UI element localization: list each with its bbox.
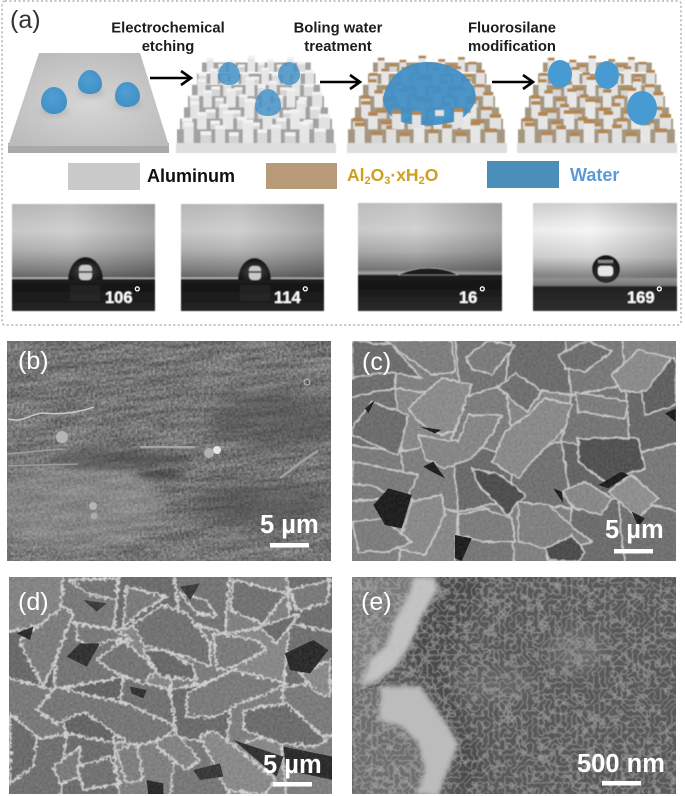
arrow: step 2 <box>320 75 360 89</box>
degree mark 169: ° <box>656 284 663 302</box>
label: (c): (c) <box>362 348 391 376</box>
arrow: step 1 <box>150 71 191 85</box>
legend: Al2O3·xH2O: 2 <box>419 175 425 187</box>
label: (a): (a) <box>10 6 41 34</box>
legend: aluminum <box>68 163 235 190</box>
step label: boiling water treatment: treatment <box>304 39 372 55</box>
photo: contact angle 106° <box>12 204 155 311</box>
label: 169°: 169 <box>627 289 655 307</box>
label: (e): (e) <box>361 588 392 616</box>
step label: electrochemical etching: Electrochemical <box>111 20 225 36</box>
photo: contact angle 16° <box>358 203 502 311</box>
scale bar: 5 µm: 5 µm <box>605 516 664 544</box>
photo: contact angle 169° <box>533 203 677 311</box>
legend: Al2O3·xH2O: Al <box>347 165 364 185</box>
label: (d): (d) <box>18 588 49 616</box>
label: 16°: 16 <box>459 289 477 307</box>
degree mark 114: ° <box>302 284 309 302</box>
degree mark 16: ° <box>479 284 486 302</box>
label: 114°: 114 <box>274 289 301 307</box>
step label: fluorosilane modification: Fluorosilane <box>468 20 556 36</box>
panel: SEM image (b) <box>7 341 331 561</box>
legend: water <box>487 161 619 188</box>
arrow: step 3 <box>492 75 533 89</box>
illustration: etched aluminum with water drops <box>176 56 336 153</box>
step label: electrochemical etching: etching <box>142 39 194 55</box>
legend: water: Water <box>570 165 619 185</box>
scale bar: 5 µm: 5 µm <box>263 751 322 779</box>
panel: SEM image (e) <box>352 577 676 796</box>
legend: Al2O3·xH2O <box>266 163 438 189</box>
photo: contact angle 114° <box>181 204 324 311</box>
panel: schematic (a) with dotted border <box>2 1 681 325</box>
scale bar: 500 nm: 500 nm <box>577 750 665 778</box>
step label: boiling water treatment: Boling water <box>294 20 383 36</box>
illustration: flat aluminum plate with water drops <box>8 53 169 153</box>
scale bar: 5 µm: 5 µm <box>260 511 319 539</box>
panel: SEM image (c) <box>345 335 682 565</box>
illustration: fluorosilane-modified surface with beaded drops <box>517 56 677 153</box>
legend: Al2O3·xH2O: O <box>371 165 384 185</box>
illustration: boehmite-coated surface with spreading water <box>347 56 507 153</box>
legend: Al2O3·xH2O: 2 <box>364 175 371 187</box>
legend: Al2O3·xH2O: ·xH <box>390 165 419 185</box>
label: 106°: 106 <box>105 289 133 307</box>
legend: Al2O3·xH2O: O <box>425 165 438 185</box>
label: (b): (b) <box>18 347 49 375</box>
legend: aluminum: Aluminum <box>147 166 235 186</box>
legend: Al2O3·xH2O: 3 <box>384 175 390 187</box>
panel: SEM image (d) <box>3 570 340 796</box>
step label: fluorosilane modification: modification <box>468 39 556 55</box>
degree mark 106: ° <box>134 284 141 302</box>
